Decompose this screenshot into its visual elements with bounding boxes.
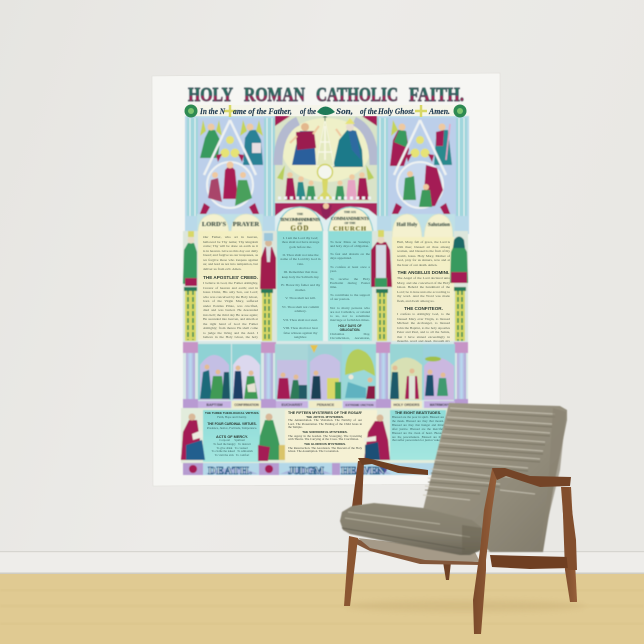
leather channels bbox=[423, 408, 555, 500]
back far leg bbox=[443, 562, 451, 580]
invocation band bbox=[184, 104, 466, 118]
invocation band: In the N bbox=[199, 106, 226, 116]
title: HOLY bbox=[188, 85, 233, 106]
panel: commandments of God background bbox=[277, 231, 323, 341]
bottom banner bbox=[183, 463, 466, 475]
commandments arches header bbox=[275, 202, 377, 234]
backrest bbox=[423, 403, 567, 552]
rear right leg bbox=[562, 487, 577, 602]
chair shadow bbox=[345, 600, 585, 612]
saint: left green bishop bbox=[183, 231, 197, 286]
figure: seated evangelist right bbox=[364, 414, 390, 460]
front right post and leg bbox=[473, 469, 498, 634]
text block: mysteries of the rosary: THE GLORIOUS MYSTERIES. bbox=[304, 442, 346, 446]
text block: eight beatitudes: Blessed are the poor in spirit. Blessed are the meek. Blessed are they that mourn. Blessed are they that hunger and thirst after justice. Blessed are the merciful. Blessed are the clean of heart. Blessed are the peacemakers. Blessed are they that suffer persecution for justice' sake. bbox=[392, 415, 444, 442]
panel: left gothic vault bbox=[187, 118, 275, 216]
sacrament labels: BAPTISM bbox=[206, 403, 223, 407]
invocation band: Holy Ghost. bbox=[377, 106, 415, 116]
text block: Ten Commandments of God: VI. Thou shalt not commit adultery. bbox=[282, 305, 319, 313]
text block: mysteries of the rosary: THE JOYFUL MYSTERIES. bbox=[306, 414, 344, 418]
twisted column inner left bbox=[261, 289, 273, 341]
sacrament labels: PENANCE bbox=[317, 403, 335, 407]
arch titles: COMMANDMENTS bbox=[331, 216, 369, 221]
tapestry cloth bbox=[152, 73, 500, 486]
front left leg bbox=[344, 536, 358, 606]
text block: virtues: To feed the hungry To instruct bbox=[213, 442, 251, 446]
green medallions bbox=[184, 104, 466, 118]
text block: Ten Commandments of God: VII. Thou shalt not steal. bbox=[283, 318, 318, 322]
pillars bbox=[183, 342, 468, 408]
invocation band: ame of the Father, bbox=[233, 106, 292, 116]
saint: right bishop with cope bbox=[371, 230, 392, 287]
invocation band: of the bbox=[360, 106, 377, 116]
text block: Hail Mary, Angelus and Confiteor: THE ANGELUS DOMINI. bbox=[398, 270, 449, 275]
wooden floor bbox=[0, 574, 644, 644]
text block: Commandments of the Church: HOLY DAYS OF OBLIGATION. bbox=[338, 324, 362, 332]
text block: Hail Mary, Angelus and Confiteor: THE CONFITEOR. bbox=[404, 306, 443, 311]
invocation band: Son, bbox=[336, 106, 353, 116]
text block: Ten Commandments of God bbox=[280, 236, 321, 339]
arch titles: Hail Holy bbox=[397, 223, 418, 228]
arch titles: TEN COMMANDMENTS bbox=[280, 217, 320, 222]
text block: Ten Commandments of God: IV. Honor thy father and thy mother. bbox=[281, 283, 320, 292]
panel: left cream text background bbox=[198, 231, 262, 340]
text block: virtues bbox=[205, 411, 259, 457]
arch titles: THE bbox=[297, 212, 303, 216]
text block: eight beatitudes: THE EIGHT BEATITUDES. bbox=[395, 411, 441, 415]
panel: rosary background bbox=[285, 410, 377, 462]
banner words: DEATH. bbox=[208, 465, 252, 477]
cloud row bbox=[278, 196, 372, 200]
scene: eucharist bbox=[275, 344, 308, 400]
scene: matrimony bbox=[423, 344, 455, 400]
text block: virtues: To give drink To counsel bbox=[216, 446, 248, 450]
text block: Commandments of the Church: To contribute to the support of our pastors. bbox=[330, 293, 370, 301]
text block: virtues: THE THREE THEOLOGICAL VIRTUES. bbox=[205, 411, 259, 415]
saint: crimson prophet bbox=[260, 233, 276, 289]
baseboard bbox=[0, 551, 644, 574]
title: CATHOLIC bbox=[316, 85, 398, 106]
angel: green and crimson bbox=[390, 120, 409, 166]
angel: blue with veil bbox=[240, 120, 263, 165]
twisted column right bbox=[454, 287, 466, 342]
sacrament frieze bbox=[183, 341, 468, 409]
text block: virtues: Faith, Hope and Charity. Prudence, Justice, Fortitude, Temperance. Corporal Spiritual bbox=[207, 414, 257, 442]
panel: beatitudes background bbox=[390, 410, 446, 460]
roundel: Holy Family bbox=[207, 162, 253, 208]
title: FAITH. bbox=[409, 85, 464, 106]
text block: virtues: To clothe the naked To admonish bbox=[211, 449, 253, 453]
kneeling saints right bbox=[335, 165, 374, 200]
arch titles bbox=[202, 210, 450, 232]
invocation band: of the bbox=[300, 106, 316, 116]
figure: seated evangelist left bbox=[181, 414, 205, 460]
text block: mysteries of the rosary: THE FIFTEEN MYSTERIES OF THE ROSARY. bbox=[288, 411, 362, 415]
arch titles: OF THE bbox=[344, 221, 356, 225]
text block: Ten Commandments of God: I. I am the Lord thy God; thou shalt not have strange gods before me. bbox=[282, 236, 319, 249]
monstrance bbox=[316, 115, 334, 199]
right arm support bbox=[561, 487, 577, 570]
angel: crimson and teal bbox=[434, 124, 452, 165]
text block: Ten Commandments of God: V. Thou shalt not kill. bbox=[285, 296, 316, 300]
seat under frame bbox=[356, 538, 480, 565]
backing strips beside tablets bbox=[183, 231, 468, 343]
arch titles: Salutation bbox=[428, 223, 450, 228]
scene: baptism bbox=[198, 344, 231, 400]
panel: right gothic vault bbox=[377, 118, 467, 216]
strip between tablets bbox=[323, 231, 328, 341]
figure: God the Father bbox=[333, 118, 363, 167]
text block: Lord's Prayer and Apostles' Creed: THE APOSTLES' CREED. bbox=[203, 275, 258, 280]
text block: Ten Commandments of God: II. Thou shalt not take the name of the Lord thy God in vain. bbox=[280, 253, 321, 266]
poster artwork bbox=[181, 115, 469, 477]
sacrament labels: EUCHARIST bbox=[282, 403, 303, 407]
twisted column left bbox=[184, 287, 197, 341]
panel: commandments of the Church background bbox=[328, 231, 372, 341]
seat cushion bbox=[340, 503, 482, 555]
right header arches bbox=[391, 214, 455, 239]
kneeling saints left bbox=[277, 165, 316, 200]
banner words: JUDGM bbox=[288, 465, 325, 477]
invocation band: Amen. bbox=[428, 106, 450, 116]
text block: Commandments of the Church: To confess at least once a year. bbox=[330, 265, 370, 273]
angel: green bbox=[200, 120, 222, 158]
panel: central Trinity bbox=[275, 115, 377, 204]
right armrest bbox=[492, 468, 571, 487]
stretcher bbox=[490, 555, 572, 569]
text block: Ten Commandments of God: III. Remember that thou keep holy the Sabbath day. bbox=[282, 270, 319, 279]
sacrament labels: CONFIRMATION bbox=[234, 403, 259, 407]
scene: confirmation bbox=[232, 344, 261, 400]
panel: right cream text background bbox=[392, 237, 454, 343]
banner words: HEAVEN bbox=[341, 465, 385, 477]
figure: seated evangelist centre bbox=[258, 414, 285, 461]
arch titles: CHURCH bbox=[333, 226, 367, 232]
gable and quatrefoil bbox=[204, 120, 256, 175]
sacrament labels: HOLY ORDERS bbox=[394, 403, 420, 407]
text block: virtues: To visit the sick To comfort bbox=[215, 453, 249, 457]
text block: Commandments of the Church bbox=[330, 240, 370, 340]
arch titles: OF bbox=[298, 222, 302, 226]
arch titles: THE SIX bbox=[344, 210, 357, 214]
scene: holy orders bbox=[390, 344, 423, 400]
text block: mysteries of the rosary: THE SORROWFUL MYSTERIES. bbox=[302, 430, 348, 434]
scene: penance bbox=[308, 344, 342, 400]
lords prayer header arches bbox=[197, 214, 263, 233]
top band: gothic panels backing bbox=[185, 116, 469, 234]
gable and quatrefoil bbox=[394, 120, 446, 175]
panel: theological virtues background bbox=[203, 410, 260, 462]
bottom row panels bbox=[181, 408, 466, 463]
spandrels bbox=[391, 203, 451, 216]
left armrest bbox=[358, 458, 428, 475]
title bbox=[188, 85, 464, 106]
armchair bbox=[340, 403, 585, 634]
arch titles: LORD'S bbox=[202, 221, 226, 228]
left rear arm post bbox=[352, 461, 364, 507]
arch titles: GOD bbox=[291, 224, 309, 232]
spandrels bbox=[199, 203, 260, 216]
text block: Commandments of the Church: To receive the Holy Eucharist during Easter time. bbox=[330, 277, 370, 289]
roundel: Annunciation bbox=[397, 162, 443, 208]
arch titles: PRAYER bbox=[233, 221, 260, 228]
sacrament labels: MATRIMONY bbox=[430, 403, 450, 407]
banner words bbox=[208, 465, 385, 477]
text block: Ten Commandments of God: VIII. Thou shalt not bear false witness against thy neighbor. bbox=[283, 326, 318, 339]
title: ROMAN bbox=[244, 85, 305, 106]
text block: mysteries of the rosary: The Annunciation. The Visitation. The Nativity of our Lord. The Presentation. The Finding of the Child Jesus in the Temple. The Agony in the Garden. The Scourging. The Crowning with Thorns. The Carrying of the Cross. The Crucifixion. The Resurrection. The Ascension. The Descent of the Holy Ghost. The Assumption. The Coronation. bbox=[288, 418, 362, 453]
scene: extreme unction bbox=[342, 344, 376, 400]
saint: right green figure bbox=[450, 236, 468, 283]
figure: Christ bbox=[290, 123, 319, 165]
sacrament labels: EXTREME UNCTION bbox=[346, 403, 373, 407]
sacrament labels bbox=[198, 401, 455, 408]
text block: virtues: THE FOUR CARDINAL VIRTUES. bbox=[207, 422, 257, 426]
twisted column inner right bbox=[376, 289, 388, 342]
text block: virtues: ACTS OF MERCY. bbox=[216, 435, 248, 439]
text block: Commandments of the Church: To fast and abstain on the days appointed. bbox=[330, 252, 370, 260]
yellow crosses and central dove bbox=[224, 105, 427, 117]
text block: Commandments of the Church: To hear Mass on Sundays and holy days of obligation. bbox=[330, 240, 370, 248]
